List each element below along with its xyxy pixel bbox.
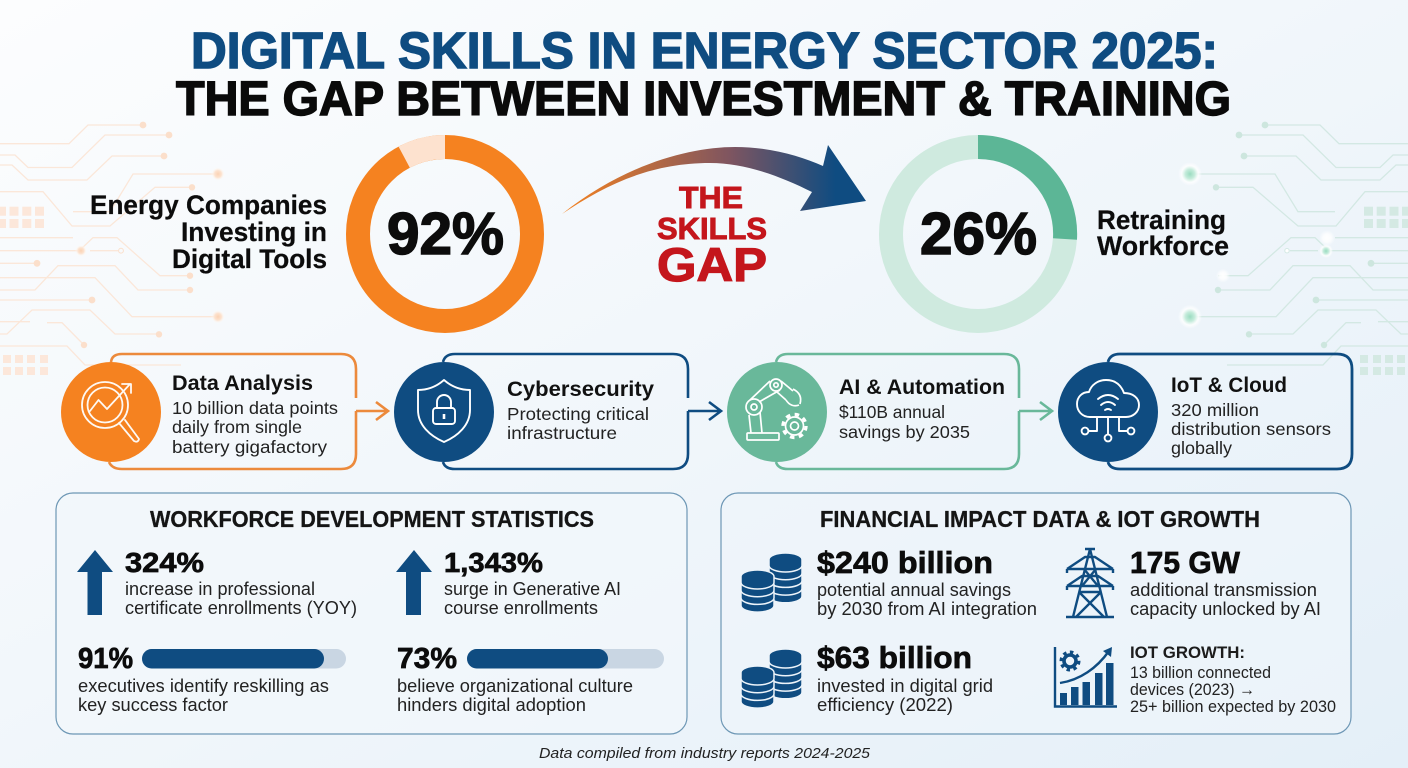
callout: the skills gap: GAP [657,238,767,291]
stat: 73% [397,643,664,715]
icon: robot arm and gear [746,379,806,440]
donut chart: 26% [891,147,1065,321]
stat: 175 GW [1066,545,1321,619]
circuit pattern: right [1178,122,1408,375]
icon: cloud network [1077,380,1139,441]
card: iot and cloud: globally [1171,438,1232,458]
callout: the skills gap: SKILLS [657,211,767,246]
stat: iot growth: 25+ billion expected by 2030 [1130,698,1336,716]
stat: 91%: key success factor [78,695,228,715]
heading: financial: FINANCIAL IMPACT DATA & IOT GROWTH [820,506,1260,532]
card: cybersecurity: Cybersecurity [507,377,654,401]
stat: $240 billion: potential annual savings [817,580,1011,600]
title: THE GAP BETWEEN INVESTMENT & TRAINING [176,73,1231,126]
stat: 73%: believe organizational culture [397,676,633,696]
stat: $240 billion: by 2030 from AI integration [817,599,1037,619]
card: cybersecurity [394,354,721,469]
stat: 324%: increase in professional [125,579,315,599]
stat: iot growth: 13 billion connected [1130,664,1271,682]
card: ai and automation [727,354,1052,469]
stat: 73%: 73% [397,643,457,675]
card: data analysis: 10 billion data points [172,398,338,418]
label: energy companies investing: Investing in [181,217,327,247]
stat: 324%: certificate enrollments (YOY) [125,598,357,618]
icon: shield and lock [418,380,470,442]
callout: the skills gap: THE [679,180,743,215]
heading: workforce: WORKFORCE DEVELOPMENT STATISTICS [150,506,594,532]
stat: 1,343%: course enrollments [444,598,598,618]
panel: workforce development statistics [56,493,687,734]
donut chart: 92% [358,147,532,321]
card: iot and cloud: IoT & Cloud [1171,373,1287,397]
stat: $63 billion: invested in digital grid [817,676,993,696]
stat: $240 billion [741,545,1037,619]
card: cybersecurity: infrastructure [507,423,617,443]
label: retraining workforce: Retraining [1097,205,1226,235]
stat: 324% [77,547,357,618]
card: data analysis: battery gigafactory [172,437,327,457]
stat: $63 billion [741,640,993,715]
arrow: investment to training [562,145,866,214]
stat: 91%: 91% [78,643,133,675]
label: retraining workforce [1097,205,1229,261]
card: ai and automation: $110B annual [839,402,945,422]
callout: the skills gap [657,180,767,291]
stat: 175 GW: capacity unlocked by AI [1130,599,1321,619]
icon: magnifier with chart [82,382,139,442]
stat: 91% [78,643,346,715]
stat: 1,343% [396,547,621,618]
stat: 324%: 324% [125,547,204,578]
stat: $240 billion: $240 billion [817,545,993,580]
stat: 1,343%: 1,343% [444,547,543,578]
panel: financial impact data and iot growth [721,493,1351,734]
card: iot and cloud [1058,354,1352,469]
stat: iot growth: IOT GROWTH: [1130,643,1245,662]
label: energy companies investing: Energy Companies [90,190,327,220]
title [176,22,1231,126]
stat: 91%: executives identify reskilling as [78,676,329,696]
donut chart: 92%: 92% [387,201,504,267]
label: energy companies investing: Digital Tools [172,244,327,274]
stat: $63 billion: efficiency (2022) [817,695,953,715]
stat: 1,343%: surge in Generative AI [444,579,621,599]
card: ai and automation: savings by 2035 [839,422,970,442]
stat: 73%: hinders digital adoption [397,695,586,715]
stat: iot growth [1055,643,1336,716]
stat: iot growth: devices (2023) → [1130,681,1255,699]
stat: 175 GW: additional transmission [1130,580,1317,600]
card: cybersecurity: Protecting critical [507,404,649,424]
circuit pattern: left [0,122,225,375]
card: ai and automation: AI & Automation [839,375,1005,399]
card: data analysis: Data Analysis [172,371,313,395]
label: retraining workforce: Workforce [1097,231,1229,261]
card: data analysis: daily from single [172,417,302,437]
footer: source note: Data compiled from industry reports 2024-2025 [539,746,871,762]
stat: 175 GW: 175 GW [1130,545,1241,580]
card: iot and cloud: 320 million [1171,400,1259,420]
donut chart: 26%: 26% [920,201,1037,267]
card: data analysis [61,354,388,469]
title: DIGITAL SKILLS IN ENERGY SECTOR 2025: [191,22,1218,79]
card: iot and cloud: distribution sensors [1171,419,1331,439]
stat: $63 billion: $63 billion [817,640,972,675]
label: energy companies investing [90,190,327,274]
